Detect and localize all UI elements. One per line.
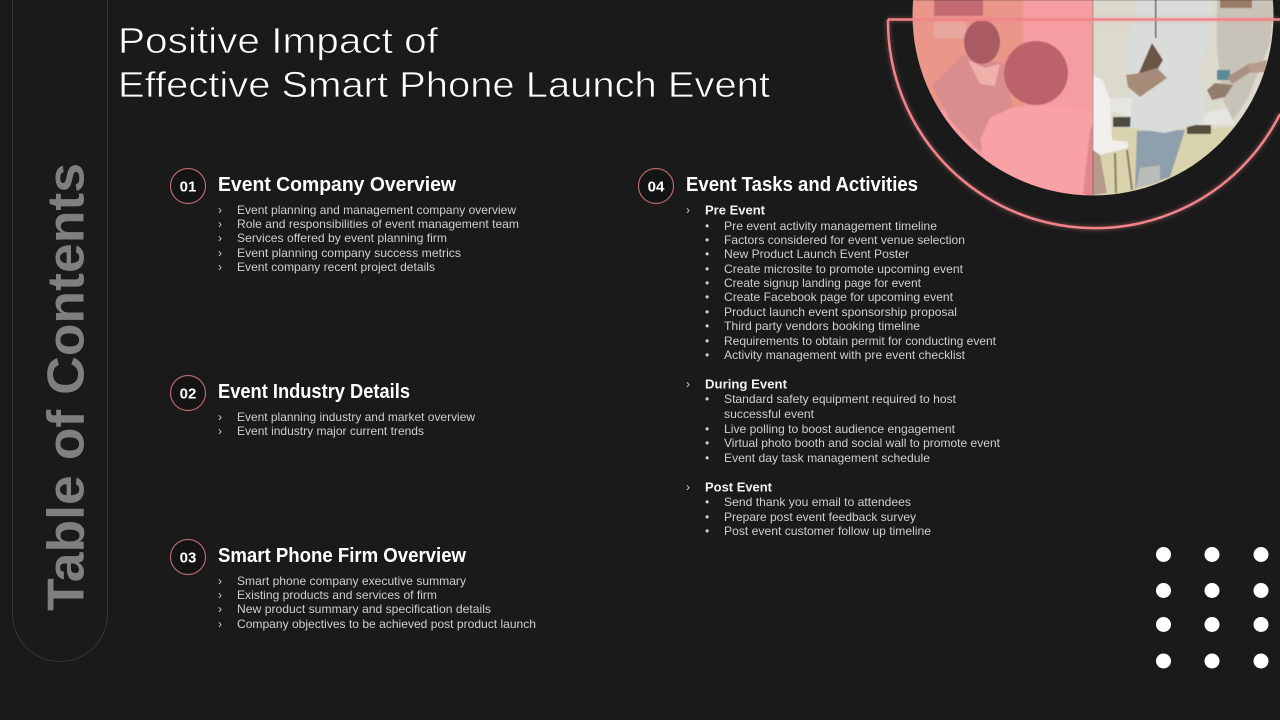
post event list: Post Event [705, 480, 773, 494]
section 01: event company overview [170, 168, 519, 274]
pre event list: Pre Event [705, 202, 766, 218]
number badge 01: 01 [180, 178, 196, 196]
list 03: › [218, 574, 222, 588]
list 02: › [218, 424, 222, 438]
title: Effective Smart Phone Launch Event [118, 64, 770, 105]
list 03: › [218, 617, 222, 631]
list 01: › [218, 231, 222, 245]
circular photo [910, 0, 1280, 200]
pre event list: • [705, 305, 709, 319]
pre event list: • [705, 247, 709, 261]
pre event list: Factors considered for event venue selection [724, 233, 965, 247]
list 01: Event company recent project details [237, 260, 435, 274]
during event list: Standard safety equipment required to host [724, 392, 957, 406]
list 02: › [218, 410, 222, 424]
section 03: smart phone firm overview [170, 540, 536, 631]
pre event list: › [686, 203, 690, 217]
pre event list: Product launch event sponsorship proposal [724, 305, 957, 319]
sidebar title: Table of Contents [38, 163, 96, 611]
decorative arc outline [888, 20, 1280, 228]
during event list: Event day task management schedule [724, 451, 930, 465]
pre event list: Activity management with pre event checklist [724, 348, 966, 362]
list 03: › [218, 602, 222, 616]
section 04: event tasks and activities [638, 168, 1001, 538]
number badge 01 [170, 168, 206, 204]
pre event list: Requirements to obtain permit for conducting event [724, 334, 997, 348]
post event list [686, 480, 931, 538]
title [118, 20, 770, 105]
list 01: Role and responsibilities of event management team [237, 217, 519, 231]
number badge 03 [170, 540, 206, 574]
list 02: Event planning industry and market overview [237, 410, 475, 424]
during event list: • [705, 392, 709, 406]
list 01: Event planning company success metrics [237, 246, 461, 260]
during event list: Live polling to boost audience engagement [724, 422, 956, 436]
post event list: Prepare post event feedback survey [724, 510, 916, 524]
heading 04: Event Tasks and Activities [686, 174, 918, 196]
during event list: • [705, 422, 709, 436]
post event list: • [705, 495, 709, 509]
list 03 [218, 574, 536, 631]
white dot grid [1156, 547, 1268, 668]
number badge 02 [170, 376, 206, 410]
during event list: • [705, 436, 709, 450]
heading 02: Event Industry Details [218, 381, 410, 403]
list 01: › [218, 217, 222, 231]
post event list: • [705, 510, 709, 524]
list 01 [218, 203, 519, 274]
list 01: › [218, 260, 222, 274]
during event list: › [686, 377, 690, 391]
pre event list: Pre event activity management timeline [724, 219, 937, 233]
pre event list [686, 202, 997, 362]
pre event list: New Product Launch Event Poster [724, 247, 909, 261]
pre event list: • [705, 219, 709, 233]
list 03: Company objectives to be achieved post product launch [237, 617, 536, 631]
pre event list: Create Facebook page for upcoming event [724, 290, 954, 304]
sidebar: table of contents pill [12, 0, 108, 662]
title: Positive Impact of [118, 20, 439, 61]
number badge 02: 02 [180, 386, 196, 402]
list 01: Event planning and management company overview [237, 203, 516, 217]
pre event list: • [705, 334, 709, 348]
post event list: › [686, 480, 690, 494]
list 03: Smart phone company executive summary [237, 574, 466, 588]
pre event list: • [705, 319, 709, 333]
post event list: Post event customer follow up timeline [724, 524, 931, 538]
list 01: › [218, 246, 222, 260]
heading 01: Event Company Overview [218, 174, 456, 196]
list 02 [218, 410, 475, 438]
number badge 04 [638, 168, 674, 204]
list 03: › [218, 588, 222, 602]
during event list: Virtual photo booth and social wall to promote event [724, 436, 1001, 450]
list 03: Existing products and services of firm [237, 588, 437, 602]
heading 03: Smart Phone Firm Overview [218, 545, 466, 567]
list 02: Event industry major current trends [237, 424, 424, 438]
during event list [686, 376, 1001, 465]
during event list: • [705, 451, 709, 465]
pre event list: • [705, 276, 709, 290]
list 03: New product summary and specification details [237, 602, 491, 616]
pre event list: Create signup landing page for event [724, 276, 922, 290]
pre event list: • [705, 233, 709, 247]
pre event list: Third party vendors booking timeline [724, 319, 920, 333]
during event list: During Event [705, 376, 788, 392]
during event list: successful event [724, 407, 815, 421]
pre event list: Create microsite to promote upcoming event [724, 262, 964, 276]
number badge 03: 03 [180, 550, 196, 566]
number badge 04: 04 [648, 178, 665, 196]
post event list: • [705, 524, 709, 538]
pre event list: • [705, 348, 709, 362]
pre event list: • [705, 262, 709, 276]
list 01: › [218, 203, 222, 217]
pre event list: • [705, 290, 709, 304]
section 02: event industry details [170, 376, 475, 438]
list 01: Services offered by event planning firm [237, 231, 447, 245]
post event list: Send thank you email to attendees [724, 495, 911, 509]
